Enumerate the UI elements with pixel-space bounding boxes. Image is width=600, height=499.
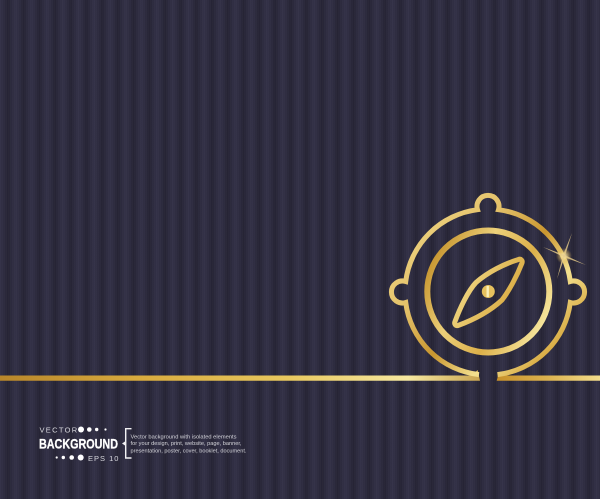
logo: background heading: BACKGROUND — [39, 436, 118, 452]
compass centre dot — [482, 285, 495, 298]
logo: vector text: VECTOR — [40, 426, 78, 434]
description text: Vector background with isolated elements — [130, 434, 237, 440]
description text: presentation, poster, cover, booklet, document. — [130, 448, 246, 454]
compass outer ring with knobs — [391, 195, 585, 375]
logo: eps text — [56, 454, 119, 463]
logo: eps text: EPS 10 — [88, 454, 119, 463]
bracket — [122, 429, 132, 458]
description text: for your design, print, website, page, banner, — [130, 441, 242, 447]
icon: sparkle — [543, 233, 586, 279]
description text — [130, 434, 246, 454]
compass inner ring — [427, 230, 549, 352]
gold baseline — [0, 370, 600, 381]
logo: vector text — [40, 426, 107, 434]
icon: compass — [391, 195, 585, 375]
compass needle — [455, 259, 522, 326]
